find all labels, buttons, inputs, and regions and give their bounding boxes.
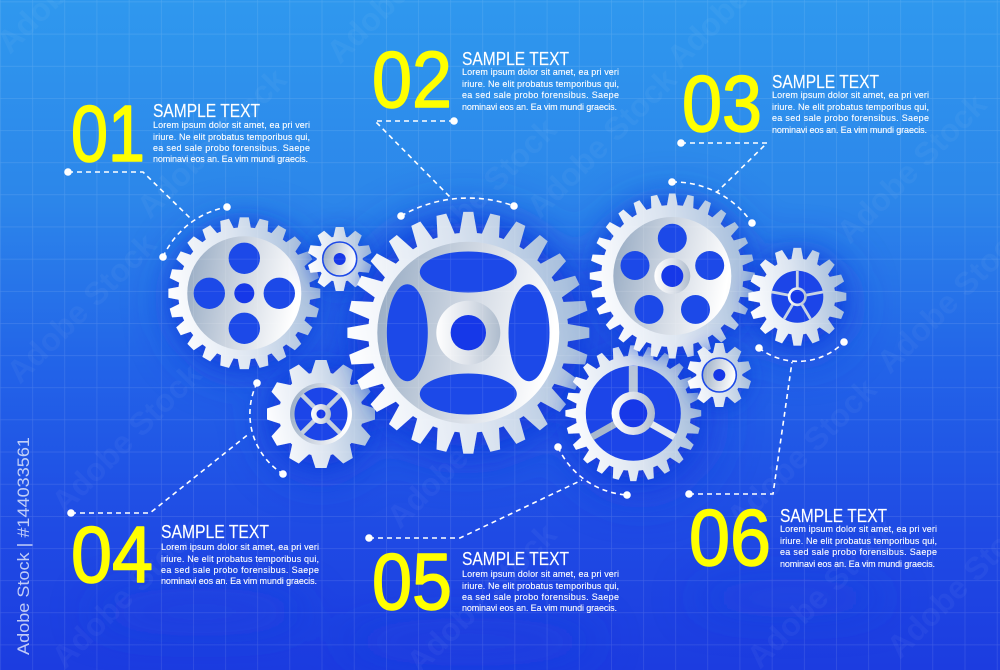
- block 06: ea sed sale probo forensibus. Saepe: [780, 547, 937, 557]
- block 06: [689, 493, 937, 582]
- block 05: [372, 537, 619, 626]
- block 06: nominavi eos an. Ea vim mundi graecis.: [780, 559, 935, 569]
- watermark: Adobe Stock: [0, 226, 163, 390]
- block 03: nominavi eos an. Ea vim mundi graecis.: [772, 125, 927, 135]
- block 04: ea sed sale probo forensibus. Saepe: [161, 565, 319, 575]
- block 02: SAMPLE TEXT: [462, 49, 569, 69]
- block 05: iriure. Ne elit probatus temporibus qui,: [462, 581, 619, 591]
- block 04: 04: [71, 510, 153, 599]
- block 01: ea sed sale probo forensibus. Saepe: [153, 143, 310, 153]
- gears: [167, 193, 847, 482]
- connector 1: [64, 168, 231, 261]
- gear 4: [266, 359, 376, 469]
- block 03: ea sed sale probo forensibus. Saepe: [772, 113, 929, 123]
- block 05: Lorem ipsum dolor sit amet, ea pri veri: [462, 569, 619, 579]
- connector 4: [67, 379, 287, 517]
- block 04: [71, 510, 319, 599]
- watermark: Adobe Stock: [719, 371, 883, 535]
- watermark: Adobe Stock: [129, 61, 293, 225]
- watermark: Adobe Stock: [829, 86, 993, 250]
- block 01: SAMPLE TEXT: [153, 101, 260, 121]
- watermark: Adobe Stock: [399, 111, 563, 275]
- block 03: [682, 59, 929, 148]
- block 05: 05: [372, 537, 452, 626]
- gear 7: [564, 344, 702, 482]
- connector 2: [375, 117, 518, 220]
- gear 2: [307, 226, 373, 292]
- block 01: [71, 89, 310, 178]
- watermark: Adobe Stock: [44, 356, 208, 520]
- soft shadows: [90, 200, 890, 654]
- watermark: Adobe Stock: [519, 61, 683, 225]
- block 03: iriure. Ne elit probatus temporibus qui,: [772, 102, 929, 112]
- block 06: SAMPLE TEXT: [780, 506, 887, 526]
- block 03: Lorem ipsum dolor sit amet, ea pri veri: [772, 90, 929, 100]
- block 04: Lorem ipsum dolor sit amet, ea pri veri: [161, 542, 319, 552]
- gear 3: [346, 211, 590, 455]
- gear 8: [686, 342, 752, 408]
- block 06: 06: [689, 493, 771, 582]
- connector 6: [685, 338, 848, 498]
- block 05: SAMPLE TEXT: [462, 549, 569, 569]
- block 02: 02: [372, 35, 452, 124]
- block 05: nominavi eos an. Ea vim mundi graecis.: [462, 603, 617, 613]
- block 06: Lorem ipsum dolor sit amet, ea pri veri: [780, 524, 937, 534]
- block 04: iriure. Ne elit probatus temporibus qui,: [161, 554, 319, 564]
- connector 5: [365, 443, 631, 542]
- block 02: Lorem ipsum dolor sit amet, ea pri veri: [462, 67, 619, 77]
- block 03: 03: [682, 59, 762, 148]
- block 02: ea sed sale probo forensibus. Saepe: [462, 90, 619, 100]
- connector 3: [668, 139, 767, 227]
- watermark: Adobe Stock: [379, 371, 543, 535]
- block 02: iriure. Ne elit probatus temporibus qui,: [462, 79, 619, 89]
- block 05: ea sed sale probo forensibus. Saepe: [462, 592, 619, 602]
- block 02: nominavi eos an. Ea vim mundi graecis.: [462, 102, 617, 112]
- block 04: SAMPLE TEXT: [161, 522, 269, 542]
- block 01: Lorem ipsum dolor sit amet, ea pri veri: [153, 120, 310, 130]
- block 06: iriure. Ne elit probatus temporibus qui,: [780, 536, 937, 546]
- gear 1: [167, 216, 321, 370]
- block 02: [372, 35, 619, 124]
- gear 6: [747, 247, 847, 347]
- block 04: nominavi eos an. Ea vim mundi graecis.: [161, 576, 317, 586]
- block 01: nominavi eos an. Ea vim mundi graecis.: [153, 154, 308, 164]
- block 03: SAMPLE TEXT: [772, 72, 879, 92]
- gear 5: [589, 193, 755, 359]
- block 01: 01: [71, 89, 145, 178]
- block 01: iriure. Ne elit probatus temporibus qui,: [153, 132, 310, 142]
- stock id label: Adobe Stock | #144033561: [14, 437, 33, 655]
